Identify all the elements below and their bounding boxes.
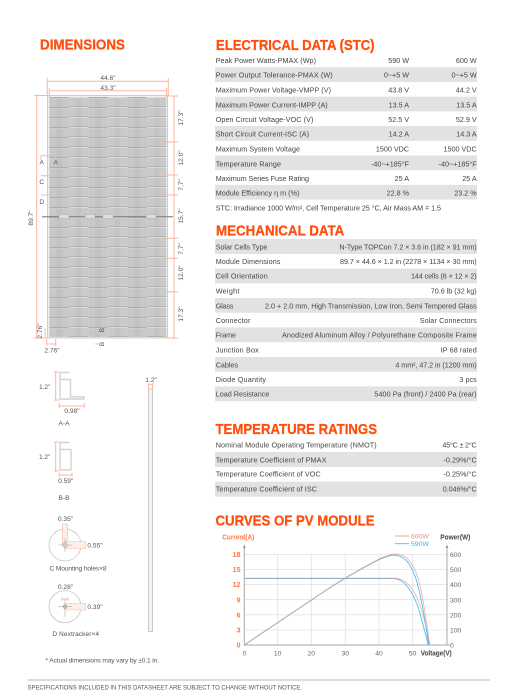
chart: IV and power curves <box>222 532 470 658</box>
panel drawing: front view of module <box>28 75 185 354</box>
heading: mechanical data: MECHANICAL DATA <box>216 224 345 240</box>
section markers A C D: A <box>53 160 58 166</box>
x axis: voltage: 10 <box>274 650 282 658</box>
table: mechanical data: Weight <box>216 286 239 295</box>
y axis right: power: 600 <box>450 552 462 559</box>
y axis right: power <box>440 534 470 650</box>
table: electrical data: 52.5 V <box>388 115 409 124</box>
dimension: corner 2.76: 2.76" <box>44 348 60 354</box>
y axis left: current: 15 <box>232 565 240 574</box>
heading: temperature ratings: TEMPERATURE RATINGS <box>216 422 377 438</box>
dimension chain right: 17.3" <box>178 306 185 322</box>
table: electrical data: 13.5 A <box>389 100 409 109</box>
module frame <box>48 96 168 338</box>
dimension: width 43.3 <box>49 85 167 97</box>
table: mechanical data: 144 cells (6 × 12 × 2) <box>411 272 477 281</box>
section markers A C D <box>39 156 58 206</box>
table: mechanical data: 5400 Pa (front) / 2400 Pa (rear) <box>374 390 477 399</box>
table: electrical data: Power Output Tolerance-PMAX (W) <box>216 71 333 80</box>
y axis right: power: 200 <box>450 612 462 619</box>
dimension chain right: 12.0" <box>178 265 185 281</box>
table: temperature ratings: 0.046%/°C <box>443 485 477 494</box>
legend: 600W <box>411 534 429 540</box>
detail D nextracker <box>49 584 103 638</box>
section markers B: B <box>99 341 106 346</box>
section markers A C D: C <box>39 179 44 186</box>
y axis right: power: 0 <box>450 642 454 650</box>
table: electrical data: -40~+185°F <box>371 159 410 168</box>
y axis left: current: 18 <box>232 550 240 559</box>
table: electrical data <box>215 56 477 212</box>
table: electrical data: 44.2 V <box>456 86 477 94</box>
dimension: width 44.6: 44.6" <box>100 75 116 82</box>
detail C mounting holes <box>49 516 107 572</box>
y axis right: power: 100 <box>450 628 462 634</box>
y axis left: current: 6 <box>236 610 240 619</box>
side view bar: 1.2" <box>145 377 157 384</box>
footer rule <box>28 679 490 681</box>
detail D nextracker: D Nextracker×4 <box>52 631 99 638</box>
curve: 600W power <box>244 554 430 645</box>
table: electrical data: 14.2 A <box>389 130 409 139</box>
table: electrical data: 25 A <box>462 174 477 183</box>
heading: dimensions: DIMENSIONS <box>40 38 125 54</box>
y axis left: current: 0 <box>236 640 240 650</box>
section markers B: B <box>99 327 106 332</box>
table: mechanical data: Junction Box <box>216 345 259 354</box>
y axis left: current <box>222 532 255 650</box>
table: mechanical data: N-Type TOPCon 7.2 × 3.6 in (182 × 91 mm) <box>339 242 477 251</box>
x axis: voltage: 50 <box>409 650 417 658</box>
table: electrical data: 600 W <box>456 56 477 65</box>
table: electrical data: Maximum Power Current-IMPP (A) <box>216 100 328 109</box>
table: mechanical data: Load Resistance <box>216 390 269 399</box>
table: mechanical data: Anodized Aluminum Alloy / Polyurethane Composite Frame <box>282 331 477 340</box>
table: mechanical data: IP 68 rated <box>441 345 477 354</box>
section B-B <box>39 442 74 502</box>
legend <box>395 534 429 548</box>
table: temperature ratings: Nominal Module Operating Temperature (NMOT) <box>216 441 377 450</box>
detail D nextracker: 0.39" <box>87 604 103 611</box>
y axis right: power: 300 <box>450 597 462 604</box>
junction band <box>42 214 173 219</box>
table: electrical data: 13.5 A <box>456 100 477 109</box>
table: mechanical data: 2.0 + 2.0 mm, High Transmission, Low Iron, Semi Tempered Glass <box>265 301 477 310</box>
detail C mounting holes: 0.35" <box>58 516 74 523</box>
table: electrical data: 1500 VDC <box>376 145 409 154</box>
dimension: width 43.3: 43.3" <box>100 85 116 92</box>
table: temperature ratings <box>215 441 477 497</box>
table: electrical data: Maximum Series Fuse Rating <box>216 174 309 183</box>
y axis right: power: Power(W) <box>440 534 470 542</box>
table: temperature ratings: Temperature Coefficient of VOC <box>216 470 321 479</box>
table: electrical data: 14.3 A <box>456 130 477 139</box>
chart axes <box>243 544 450 645</box>
section A-A: 0.98" <box>64 408 80 415</box>
table: electrical data: Short Circuit Current-ISC (A) <box>216 130 309 139</box>
solar cell grid <box>49 97 166 337</box>
dimension: height 89.7: 89.7" <box>28 210 35 226</box>
table: temperature ratings: Temperature Coefficient of ISC <box>216 485 317 494</box>
table: temperature ratings: -0.29%/°C <box>443 455 477 464</box>
y axis left: current: 3 <box>236 626 240 634</box>
dimension chain right: 7.7" <box>178 243 185 255</box>
section markers A C D: D <box>39 199 44 206</box>
table: electrical data: Module Efficiency η m (%) <box>216 189 299 198</box>
dimension: width 44.6 <box>47 75 168 96</box>
table: electrical data: Maximum Power Voltage-VMPP (V) <box>216 86 331 94</box>
x axis: voltage: 40 <box>375 650 383 658</box>
x axis: voltage: 0 <box>243 650 247 658</box>
section B-B: B-B <box>58 495 70 502</box>
dimension chain right <box>166 96 185 338</box>
footnote: * Actual dimensions may vary by ±0.1 in. <box>46 658 159 664</box>
table: mechanical data: Connector <box>216 316 251 325</box>
heading: electrical data: ELECTRICAL DATA (STC) <box>216 38 375 54</box>
table: mechanical data: 70.6 lb (32 kg) <box>431 286 477 295</box>
dimension chain right: 12.0" <box>178 150 185 166</box>
table: electrical data: 23.2 % <box>454 189 477 198</box>
table: electrical data: Temperature Range <box>216 159 281 168</box>
table: electrical data: 0~+5 W <box>384 71 409 80</box>
dimension chain right: 15.7" <box>178 208 185 224</box>
table: mechanical data: 89.7 × 44.6 × 1.2 in (2278 × 1134 × 30 mm) <box>340 257 477 266</box>
table: electrical data: 43.8 V <box>388 86 409 94</box>
table: electrical data: 0~+5 W <box>452 71 477 80</box>
y axis left: current: 9 <box>236 595 240 604</box>
section B-B: 1.2" <box>39 454 51 461</box>
table: mechanical data: 3 pcs <box>459 375 477 384</box>
table: mechanical data: 4 mm², 47.2 in (1200 mm) <box>395 360 477 369</box>
table: electrical data: -40~+185°F <box>439 159 477 168</box>
table: temperature ratings: 45°C ± 2°C <box>442 441 477 450</box>
table: mechanical data: Solar Connectors <box>420 316 477 325</box>
table: mechanical data: Solar Cells Type <box>216 242 267 251</box>
table: electrical data: 52.9 V <box>456 115 477 124</box>
dimension chain right: 17.3" <box>178 110 185 126</box>
table: temperature ratings: Temperature Coefficient of PMAX <box>216 455 327 464</box>
table: mechanical data: Diode Quantity <box>216 375 266 384</box>
curve: 590W current <box>244 579 428 645</box>
table: mechanical data <box>215 239 477 401</box>
y axis left: current: 12 <box>232 580 240 589</box>
table: mechanical data: Cell Orientation <box>216 272 268 281</box>
x axis: voltage: 30 <box>342 650 349 658</box>
section A-A <box>39 372 84 428</box>
table: electrical data: Peak Power Watts-PMAX (Wp) <box>216 56 316 65</box>
y axis right: power: 500 <box>450 567 462 574</box>
curve: 600W current <box>244 578 430 645</box>
side view bar <box>145 377 157 632</box>
section A-A: A-A <box>58 420 70 428</box>
section markers A C D: A <box>39 160 44 166</box>
section B-B: 0.59" <box>58 478 74 485</box>
x axis: voltage: Voltage(V) <box>421 650 452 658</box>
heading: curves of PV module: CURVES OF PV MODULE <box>216 514 375 530</box>
detail D nextracker: 0.28" <box>58 584 74 591</box>
section markers B <box>95 327 106 346</box>
detail C mounting holes: C Mounting holes×8 <box>50 566 107 572</box>
table: mechanical data: Glass <box>216 301 234 310</box>
table: electrical data: STC: Irradiance 1000 W/m², Cell Temperature 25 °C, Air Mass AM = 1.5 <box>216 203 441 212</box>
table: temperature ratings: -0.25%/°C <box>443 470 477 479</box>
table: electrical data: 22.8 % <box>387 189 410 198</box>
dimension: corner 2.76: 2.76" <box>37 323 44 339</box>
y axis left: current: Current(A) <box>222 532 255 542</box>
section A-A: 1.2" <box>39 384 51 391</box>
dimension chain right: 7.7" <box>178 179 185 191</box>
table: mechanical data: Cables <box>216 360 238 369</box>
footer note: SPECIFICATIONS INCLUDED IN THIS DATASHEET ARE SUBJECT TO CHANGE WITHOUT NOTICE. <box>28 684 302 692</box>
table: electrical data: 1500 VDC <box>444 145 477 154</box>
table: mechanical data: Module Dimensions <box>216 257 281 266</box>
x axis: voltage <box>243 650 452 658</box>
table: electrical data: Open Circuit Voltage-VOC (V) <box>216 115 313 124</box>
dimension: corner 2.76 <box>37 323 60 354</box>
table: mechanical data: Frame <box>216 331 236 340</box>
x axis: voltage: 20 <box>308 650 315 658</box>
detail C mounting holes: 0.55" <box>87 542 103 550</box>
table: electrical data: Maximum System Voltage <box>216 145 300 154</box>
legend: 590W <box>411 541 429 548</box>
y axis right: power: 400 <box>450 582 462 589</box>
table: electrical data: 25 A <box>395 174 409 183</box>
chart grid <box>244 554 447 645</box>
table: electrical data: 590 W <box>388 56 409 65</box>
curve: 590W power <box>244 555 429 645</box>
dimension: height 89.7 <box>28 96 48 338</box>
